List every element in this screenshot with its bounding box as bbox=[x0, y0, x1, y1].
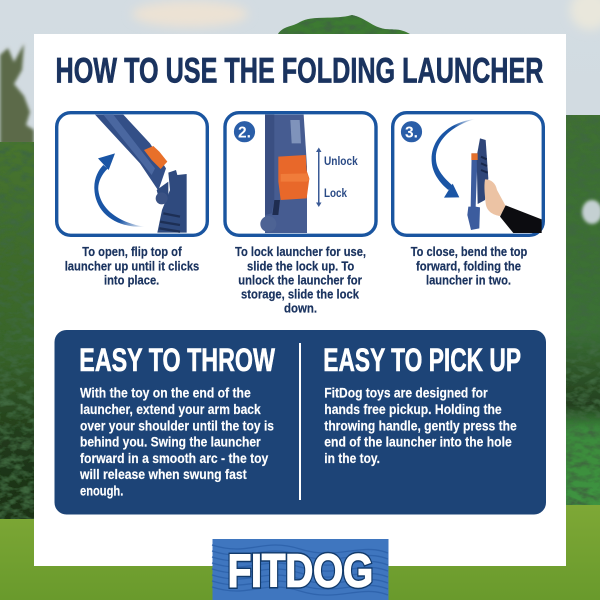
text: throwing instructions: will release when swung fast bbox=[79, 467, 247, 482]
arrow: fold forward bbox=[432, 119, 476, 198]
caption: step 1: launcher up until it clicks bbox=[65, 260, 199, 274]
text: throwing instructions: behind you. Swing the launcher bbox=[80, 435, 261, 450]
icon: folded launcher in hand bbox=[467, 138, 542, 233]
text: throwing instructions bbox=[79, 386, 274, 498]
white card bbox=[34, 34, 566, 566]
caption: step 1: into place. bbox=[104, 274, 159, 288]
text: pickup instructions: hands free pickup. Holding the bbox=[324, 402, 502, 417]
text: throwing instructions: enough. bbox=[80, 484, 123, 498]
text: pickup instructions bbox=[324, 386, 517, 466]
caption: step 2: To lock launcher for use, bbox=[235, 245, 366, 259]
heading: easy to throw: EASY TO THROW bbox=[79, 342, 276, 378]
panel: tips bbox=[54, 330, 546, 514]
logo: FitDog: FITDOG bbox=[228, 545, 373, 597]
heading: easy to pick up: EASY TO PICK UP bbox=[323, 342, 521, 378]
caption: step 2 bbox=[235, 245, 366, 316]
icon: launcher lock bbox=[260, 115, 309, 233]
text: pickup instructions: FitDog toys are designed for bbox=[324, 386, 488, 401]
label: Unlock: Unlock bbox=[324, 156, 358, 168]
caption: step 2: slide the lock up. To bbox=[247, 260, 355, 274]
panel: step 1 open bbox=[57, 113, 207, 235]
arrow: flip up bbox=[94, 153, 145, 227]
caption: step 3: forward, folding the bbox=[416, 260, 521, 274]
text: throwing instructions: With the toy on the end of the bbox=[80, 386, 251, 401]
logo: FitDog: FITDOG bbox=[228, 545, 373, 597]
caption: step 2: storage, slide the lock bbox=[241, 288, 359, 302]
caption: step 3: launcher in two. bbox=[426, 274, 511, 288]
badge: step 2: 2. bbox=[238, 124, 251, 142]
text: pickup instructions: in the toy. bbox=[324, 451, 380, 466]
text: pickup instructions: throwing handle, gently press the bbox=[324, 418, 517, 433]
caption: step 2: down. bbox=[284, 302, 317, 316]
badge: step 3 bbox=[400, 121, 422, 143]
text: throwing instructions: launcher, extend your arm back bbox=[80, 402, 261, 417]
arrow: unlock and lock direction bbox=[316, 148, 322, 207]
caption: step 2: unlock the launcher for bbox=[238, 274, 362, 288]
caption: step 3 bbox=[411, 245, 528, 288]
badge: step 2 bbox=[234, 121, 256, 143]
panel: step 3 close bbox=[393, 113, 543, 235]
badge: step 3: 3. bbox=[405, 124, 418, 142]
panel: step 2 lock bbox=[225, 113, 376, 235]
caption: step 1: To open, flip top of bbox=[82, 245, 182, 259]
label: Lock: Lock bbox=[324, 188, 348, 200]
caption: step 3: To close, bend the top bbox=[411, 245, 528, 259]
text: throwing instructions: over your shoulder until the toy is bbox=[80, 418, 274, 433]
caption: step 1 bbox=[65, 245, 199, 288]
icon: launcher opening bbox=[95, 115, 187, 233]
text: throwing instructions: forward in a smooth arc - the toy bbox=[80, 451, 269, 466]
text: pickup instructions: end of the launcher into the hole bbox=[324, 435, 512, 450]
